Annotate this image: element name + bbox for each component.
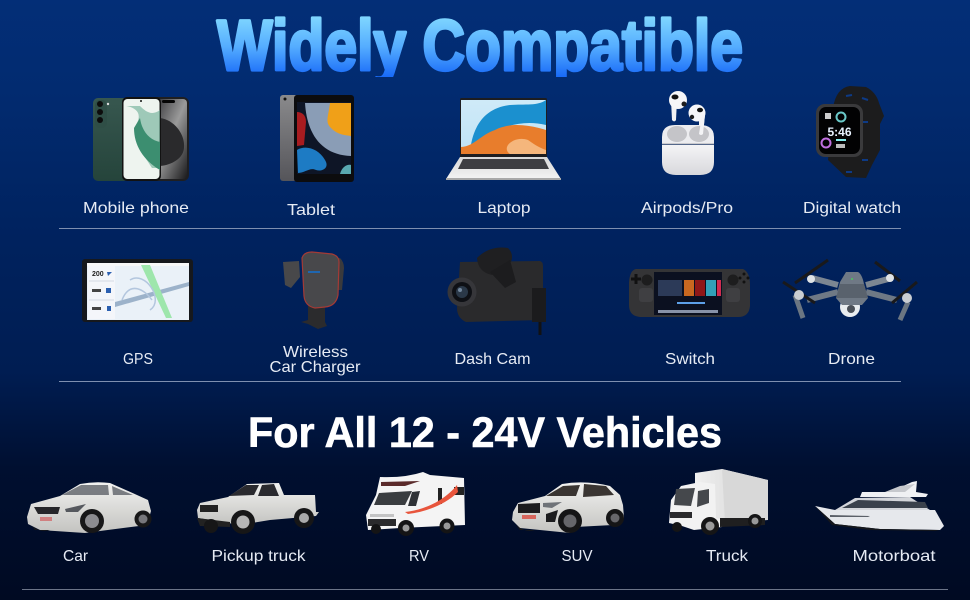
icon: gps: 200 [92, 271, 104, 278]
item: gps [82, 259, 193, 368]
icon: car [27, 482, 152, 533]
label: motorboat: Motorboat [852, 548, 936, 565]
item: truck [669, 469, 768, 565]
item: drone [783, 260, 917, 368]
item: mobile phone [83, 97, 189, 217]
item: switch [629, 269, 750, 368]
icon: tablet [280, 95, 354, 182]
icon: laptop [446, 98, 561, 180]
label: digital watch: Digital watch [803, 200, 901, 217]
label: pickup truck: Pickup truck [212, 548, 307, 565]
item: rv [366, 472, 465, 565]
item: tablet [280, 95, 354, 219]
item: wireless car charger [270, 252, 361, 376]
item: pickup truck [197, 483, 319, 565]
panel: device row two [82, 247, 917, 376]
label: wireless car charger [270, 344, 361, 376]
label: truck: Truck [706, 548, 749, 565]
icon: drone [783, 260, 917, 320]
label: car: Car [63, 548, 89, 565]
label: gps: GPS [123, 351, 153, 368]
item: laptop [446, 98, 561, 217]
icon: charger [283, 252, 344, 329]
item: digital watch [803, 86, 901, 217]
icon: watch: 5:46 [827, 125, 852, 139]
title: Widely Compatible [217, 7, 743, 86]
label: suv: SUV [562, 548, 593, 565]
icon: pickup truck [197, 483, 319, 534]
label: drone: Drone [828, 351, 875, 368]
icon: suv [512, 482, 624, 533]
icon: truck [669, 469, 768, 535]
item: suv [512, 482, 624, 565]
label: rv: RV [409, 548, 429, 565]
item: airpods [641, 91, 733, 217]
icon: rv [366, 472, 465, 536]
item: motorboat [815, 481, 944, 565]
panel: device row one [83, 86, 901, 219]
label: tablet: Tablet [287, 202, 336, 219]
label: wireless car charger: Wireless [283, 344, 348, 361]
label: airpods: Airpods/Pro [641, 200, 733, 217]
icon: airpods [662, 91, 714, 175]
icon: handheld console [629, 269, 750, 317]
item: dash cam [448, 247, 546, 368]
label: wireless car charger: Car Charger [270, 359, 361, 376]
heading: vehicles: For All 12 - 24V Vehicles [248, 409, 722, 457]
item: car [27, 482, 152, 565]
icon: dash cam [448, 247, 546, 335]
label: mobile phone: Mobile phone [83, 200, 189, 217]
icon: phones [93, 97, 189, 181]
label: dash cam: Dash Cam [454, 351, 530, 368]
panel: vehicle row [27, 469, 944, 565]
label: laptop: Laptop [478, 200, 531, 217]
icon: motorboat [815, 481, 944, 531]
label: switch: Switch [665, 351, 715, 368]
